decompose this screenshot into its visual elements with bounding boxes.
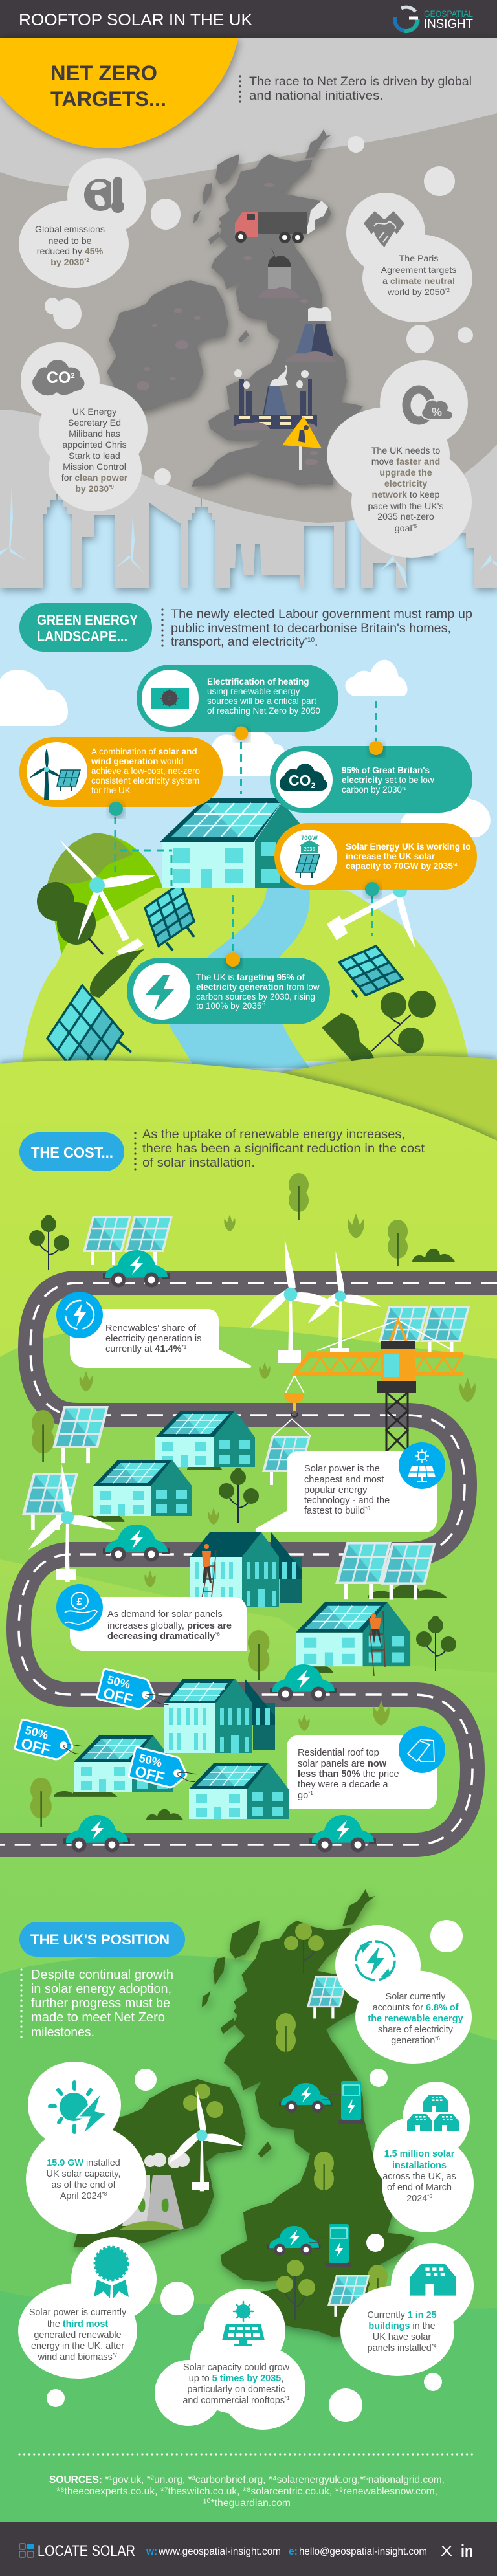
icon: CO2 cloud dark: 2 (311, 781, 316, 790)
icon: CO2 cloud dark (280, 764, 327, 791)
title: ROOFTOP SOLAR IN THE UK (19, 11, 252, 29)
text: 70GW: Solar Energy UK is working to (346, 842, 471, 852)
text: 95 percent target: to 100% by 2035 (196, 1001, 266, 1011)
callout: residential price (287, 1726, 445, 1809)
intro text: green energy: *10 (305, 637, 315, 644)
text: 6.8 percent: share of electricity (378, 2025, 454, 2035)
text: residential price: less than 50% the price (298, 1769, 399, 1779)
dotted divider (19, 2453, 472, 2456)
price tag: 50% off: 50% (138, 1752, 164, 1770)
heading: net zero targets: NET ZERO (50, 61, 157, 85)
node: orange (234, 726, 248, 740)
text: clean power: appointed Chris (62, 440, 127, 450)
heading pill: green energy landscape (19, 603, 152, 652)
text: cheapest technology: Solar power is the (304, 1464, 380, 1474)
map illustrations: trees (183, 1923, 388, 2320)
cars (63, 1250, 376, 1852)
sources: SOURCES: *¹gov.uk, *²un.org, *³carbonbrief.org, *⁴solarenergyuk.org,*⁵nationalgrid.com, (49, 2474, 445, 2485)
text: falling prices: increases globally, prices are (107, 1621, 232, 1631)
text: electricity network: pace with the UK's (368, 501, 444, 512)
text: 1.5 million: 1.5 million solar (384, 2149, 455, 2159)
contact details: e: (289, 2546, 298, 2557)
text: electricity network: upgrade the (379, 468, 432, 478)
text: low carbon electricity: *1 (402, 787, 406, 791)
text: solar and wind: achieve a low-cost, net-zero (91, 766, 200, 776)
text: 95 percent target: carbon sources by 2030, rising (196, 992, 315, 1002)
contact details: www.geospatial-insight.com (158, 2546, 281, 2557)
contact details: w: (146, 2546, 157, 2557)
text: 6.8 percent: accounts for 6.8% of (373, 2003, 458, 2013)
bubble: global emissions (19, 158, 146, 288)
text: electricity network: *5 (412, 523, 417, 529)
node: teal (109, 802, 123, 816)
text: solar and wind: for the UK (91, 786, 131, 795)
text: renewables share: electricity generation is (105, 1334, 201, 1344)
callout: renewables share (56, 1292, 251, 1368)
bubble: paris agreement (346, 193, 472, 322)
icon: sun and solar panel (399, 1442, 445, 1489)
icon: warning sign (282, 416, 322, 470)
callout: 70GW (274, 823, 477, 890)
text: 15.9 GW: *8 (102, 2191, 107, 2197)
text: cheapest technology: technology - and the (304, 1495, 390, 1506)
text: 1.5 million: *6 (427, 2194, 432, 2199)
text: third most: wind and biomass (38, 2352, 118, 2362)
text: solar and wind: consistent electricity system (91, 776, 199, 786)
text: residential price: solar panels are now (298, 1759, 386, 1769)
text: electricity network: network to keep (372, 490, 439, 500)
heading blob: net zero targets (0, 38, 238, 148)
text: cheapest technology: fastest to build (304, 1506, 370, 1516)
header bar (0, 0, 497, 38)
sky background (0, 38, 497, 1105)
icon: pound in hand: £ (77, 1596, 83, 1607)
intro text: green energy: public investment to decarbonise Britain's homes, (171, 621, 451, 635)
text: clean power: for clean power (61, 473, 127, 483)
bubble: 6.8 percent (335, 1925, 472, 2064)
land: lime foreground (0, 1060, 497, 2522)
text: electrification of heating: of reaching Net Zero by 2050 (207, 706, 320, 716)
price tag: 50% off: OFF (133, 1763, 166, 1786)
icon: rosette (94, 2247, 129, 2298)
contact details: hello@geospatial-insight.com (299, 2546, 427, 2557)
heading pill: the cost: THE COST... (31, 1144, 113, 1161)
road (0, 1283, 497, 1845)
heading pill: the UK's position: THE UK'S POSITION (30, 1932, 170, 1948)
text: 1 in 25: Currently 1 in 25 (367, 2310, 437, 2320)
intro text: the cost: As the uptake of renewable energy increases, (142, 1127, 405, 1141)
text: cheapest technology: popular energy (304, 1485, 368, 1495)
text: 15.9 GW: as of the end of (51, 2180, 116, 2190)
icon: price tags (399, 1726, 445, 1773)
house overlapping callout (189, 1763, 289, 1819)
text: 15.9 GW: April 2024 (60, 2191, 107, 2201)
social icons (441, 2541, 473, 2560)
icon: truck (235, 201, 328, 243)
icon: turbine and panel (29, 749, 80, 800)
text: paris agreement: a climate neutral (382, 276, 455, 287)
icon: recycle lightning teal (356, 1941, 395, 1980)
text: low carbon electricity: 95% of Great Britan's (342, 765, 430, 775)
icon: lightning (146, 975, 175, 1011)
text: 6.8 percent: the renewable energy (368, 2014, 463, 2024)
icon: cooling towers (285, 307, 337, 362)
intro text: UK's position: Despite continual growth (31, 1967, 173, 1982)
icon: zero percent (406, 390, 453, 421)
text: clean power: Stark to lead (69, 451, 120, 461)
skyline turbines (0, 485, 497, 589)
price tag: 50% off: OFF (19, 1735, 52, 1758)
text: 1 in 25: *4 (432, 2343, 437, 2349)
text: clean power: Mission Control (63, 462, 126, 472)
text: 6.8 percent: generation (391, 2036, 440, 2046)
bubble: clean power (21, 342, 148, 511)
logo: Geospatial Insight (395, 7, 473, 31)
icon: waste bag (258, 246, 300, 298)
land: lighter band (0, 1559, 497, 2522)
bubble: 5 times by 2035 (155, 2289, 305, 2430)
text: falling prices: decreasing dramatically (107, 1631, 220, 1642)
map: UK green (73, 1889, 415, 2339)
text: 6.8 percent: Solar currently (386, 1992, 446, 2002)
text: 5 times by 2035: particularly on domestic (187, 2384, 285, 2395)
text: clean power: Secretary Ed (68, 418, 121, 428)
text: electricity network: move faster and (371, 457, 440, 467)
illustration: house with solar roof (160, 798, 309, 888)
heading pill: green energy landscape: GREEN ENERGY (37, 611, 138, 628)
icon: 70GW house panel: 2035 (304, 846, 315, 852)
land: darker green (0, 1955, 497, 2522)
text: 95 percent target: electricity generation from low (196, 982, 320, 992)
text: clean power: UK Energy (72, 407, 117, 417)
price tag: 50% off: OFF (102, 1684, 135, 1708)
dashed connectors (115, 701, 376, 953)
map: UK grey (91, 129, 363, 487)
river (170, 888, 310, 1068)
text: 1 in 25: buildings in the (368, 2321, 436, 2331)
text: electricity network: goal (395, 523, 417, 534)
icon: 70GW house panel: 70GW (301, 835, 318, 841)
intro text: net zero: The race to Net Zero is driven by global (249, 74, 472, 89)
heading: net zero targets (50, 61, 166, 111)
text: 1.5 million: installations (392, 2161, 447, 2171)
hills: right back hill (282, 1056, 497, 1152)
illustration: large turbine and tree (37, 840, 155, 958)
map illustrations: solar arrays (307, 1976, 370, 2317)
icon: recycle lightning (56, 1292, 103, 1338)
text: third most: *7 (113, 2352, 118, 2358)
social icons: in (461, 2541, 473, 2560)
text: electrification of heating: sources will be a critical part (207, 696, 316, 706)
intro text: UK's position: further progress must be (31, 1996, 170, 2010)
text: third most: Solar power is currently (29, 2307, 127, 2318)
heading: net zero targets: TARGETS... (50, 87, 166, 111)
intro text: green energy: The newly elected Labour government must ramp up (171, 607, 472, 621)
text: residential price: *1 (308, 1790, 313, 1796)
text: third most: the third most (47, 2319, 108, 2329)
social icons: X (441, 2543, 452, 2559)
logo: Geospatial Insight: GEOSPATIAL (424, 8, 473, 19)
text: electrification of heating: Electrification of heating (207, 677, 309, 687)
clouds (0, 660, 491, 837)
text: solar and wind: wind generation would (91, 756, 184, 766)
callout: 95 percent target (127, 958, 330, 1024)
text: global emissions: *2 (84, 258, 89, 263)
land: mid green (0, 1324, 497, 2522)
heading pill: the cost (19, 1132, 124, 1171)
heading pill: green energy landscape: LANDSCAPE... (37, 628, 127, 644)
text: solar and wind: A combination of solar and (91, 747, 197, 756)
illustration: right turbine and trees (90, 883, 436, 1061)
icon: pound in hand (56, 1584, 103, 1631)
text: falling prices: As demand for solar panels (107, 1609, 223, 1620)
small bubbles white (47, 1920, 463, 2422)
text: cheapest technology: cheapest and most (304, 1475, 384, 1485)
text: global emissions: need to be (48, 236, 92, 247)
text: electricity network: The UK needs to (371, 446, 440, 456)
text: 6.8 percent: *6 (435, 2036, 440, 2042)
text: global emissions: by 2030 (50, 258, 89, 268)
text: cheapest technology: *6 (365, 1506, 370, 1512)
price tag: 50% off (128, 1747, 200, 1794)
text: paris agreement: Agreement targets (381, 265, 456, 276)
callout: solar and wind (19, 737, 223, 807)
text: 5 times by 2035: Solar capacity could grow (183, 2362, 290, 2373)
intro text: UK's position: milestones. (31, 2025, 94, 2040)
text: low carbon electricity: carbon by 2030 (342, 785, 406, 795)
text: 5 times by 2035: up to 5 times by 2035, (189, 2373, 283, 2384)
text: paris agreement: *2 (445, 287, 450, 293)
intro text: green energy: . (315, 635, 318, 649)
icon: zero percent: % (432, 406, 442, 419)
small tree overlapping callout (248, 1630, 269, 1680)
illustration: hill solar panels (47, 883, 403, 1086)
callout: cheapest technology (256, 1442, 445, 1532)
price tag: 50% off (96, 1669, 173, 1717)
intro text: the cost: of solar installation. (142, 1156, 255, 1170)
node: orange (369, 741, 383, 755)
intro text: UK's position (21, 1967, 173, 2040)
scenery: white turbines (28, 1238, 381, 1582)
text: residential price: they were a decade a (298, 1779, 388, 1790)
footer bar (0, 2522, 497, 2576)
logo: Geospatial Insight: INSIGHT (424, 17, 473, 31)
text: 1.5 million: of end of March (387, 2183, 452, 2193)
sources: *⁶theecoexperts.co.uk, *⁷theswitch.co.uk, *⁸solarcentric.co.uk, *⁹renewablesnow.com, (56, 2486, 437, 2497)
text: global emissions: reduced by 45% (37, 247, 103, 257)
text: electricity network: 2035 net-zero (377, 512, 434, 522)
text: 15.9 GW: UK solar capacity, (47, 2169, 120, 2179)
text: 95 percent target: *1 (261, 1003, 266, 1007)
bubble: 1.5 million (373, 2082, 474, 2232)
icon: CO2 cloud: CO (47, 369, 71, 387)
scenery: houses (74, 1411, 410, 1792)
text: 5 times by 2035: and commercial rooftops (182, 2395, 290, 2406)
text: falling prices: *6 (215, 1631, 220, 1637)
text: third most: energy in the UK, after (31, 2341, 124, 2351)
text: 1.5 million: across the UK, as (382, 2172, 456, 2182)
icon: sun and bolt (50, 2082, 107, 2135)
icon: sun over solar panel (222, 2302, 265, 2346)
text: electrification of heating: using renewable energy (207, 687, 300, 696)
panel: net zero targets background with skyline cut-out (0, 38, 497, 588)
text: global emissions: Global emissions (35, 225, 105, 235)
icon: 70GW house panel (296, 835, 321, 878)
text: 1 in 25: UK have solar (373, 2332, 431, 2342)
icon: CO2 cloud (32, 360, 84, 395)
map illustrations: cooling towers and turbine (119, 2089, 244, 2230)
text: renewables share: *1 (182, 1344, 187, 1350)
icon: power station (232, 365, 317, 430)
intro text: green energy: transport, and electricity (171, 635, 305, 649)
callout: electrification of heating (137, 665, 338, 732)
map mottling (137, 183, 318, 465)
text: 95 percent target: The UK is targeting 95% of (196, 973, 305, 982)
bubble: electricity network (327, 360, 472, 558)
node: orange (226, 952, 240, 967)
intro text: UK's position: made to meet Net Zero (31, 2010, 165, 2025)
text: 70GW: increase the UK solar (346, 852, 436, 861)
text: electricity network: electricity (384, 479, 427, 489)
text: residential price: Residential roof top (298, 1748, 379, 1758)
price tag: 50% off: 50% (24, 1724, 50, 1742)
icon: heat pump (151, 688, 189, 709)
text: clean power: *9 (109, 484, 114, 490)
callout: low carbon electricity (270, 746, 472, 813)
price tag: 50% off (14, 1719, 86, 1766)
small bubbles grey (45, 136, 473, 485)
text: clean power: by 2030 (75, 484, 114, 494)
intro text: the cost: there has been a significant reduction in the cost (142, 1141, 425, 1156)
sources: ¹⁰*theguardian.com (203, 2498, 291, 2509)
text: 70GW: *4 (453, 863, 458, 868)
intro text: net zero: and national initiatives. (249, 89, 383, 103)
scenery: trees, bushes and grass (29, 1173, 476, 1827)
bubble: 15.9 GW (26, 2062, 146, 2234)
scenery: solar arrays (22, 1216, 470, 1600)
price tag: 50% off: 50% (106, 1673, 132, 1691)
bubble: third most (18, 2237, 157, 2379)
text: paris agreement: world by 2050 (387, 287, 450, 298)
hills: back hill (47, 833, 165, 971)
contact details (146, 2546, 427, 2557)
text: 1 in 25: panels installed (368, 2343, 437, 2353)
text: 1.5 million: 2024 (406, 2194, 432, 2204)
icon: globe thermometer (84, 175, 124, 213)
text: renewables share: Renewables' share of (105, 1323, 197, 1334)
callout: falling prices (56, 1584, 247, 1651)
text: 5 times by 2035: *1 (285, 2395, 290, 2401)
text: clean power: Miliband has (69, 429, 120, 439)
intro text: UK's position: in solar energy adoption, (31, 1981, 171, 1996)
workers on ladders (198, 1544, 385, 1676)
illustration: crane (273, 1320, 463, 1451)
text: renewables share: currently at 41.4% (105, 1344, 182, 1354)
text: 15.9 GW: 15.9 GW installed (47, 2158, 120, 2168)
icon: CO2 cloud: 2 (71, 372, 75, 380)
icon: three houses (407, 2095, 459, 2131)
land: darkest green (0, 2291, 497, 2522)
sources (49, 2474, 445, 2509)
logo: Locate Solar: LOCATE SOLAR (38, 2542, 135, 2560)
dark grey land area (0, 113, 497, 523)
heading pill: the UK's position (19, 1922, 185, 1957)
map illustrations: EV chargers (267, 2081, 364, 2267)
intro text: the cost (135, 1127, 425, 1171)
node: teal (365, 882, 379, 896)
text: residential price: go (298, 1790, 313, 1801)
text: 70GW: capacity to 70GW by 2035 (346, 861, 458, 871)
icon: handshake (364, 211, 404, 247)
icon: CO2 cloud dark: CO (289, 772, 311, 789)
icon: house with panels (410, 2264, 456, 2296)
intro text: green energy (162, 607, 472, 649)
text: third most: generated renewable (34, 2330, 122, 2340)
intro text: net zero (240, 74, 472, 103)
bubble: 1 in 25 (340, 2243, 474, 2376)
text: paris agreement: The Paris (399, 254, 438, 264)
text: low carbon electricity: electricity set to be low (342, 775, 434, 785)
hills: main hill (22, 888, 469, 1061)
